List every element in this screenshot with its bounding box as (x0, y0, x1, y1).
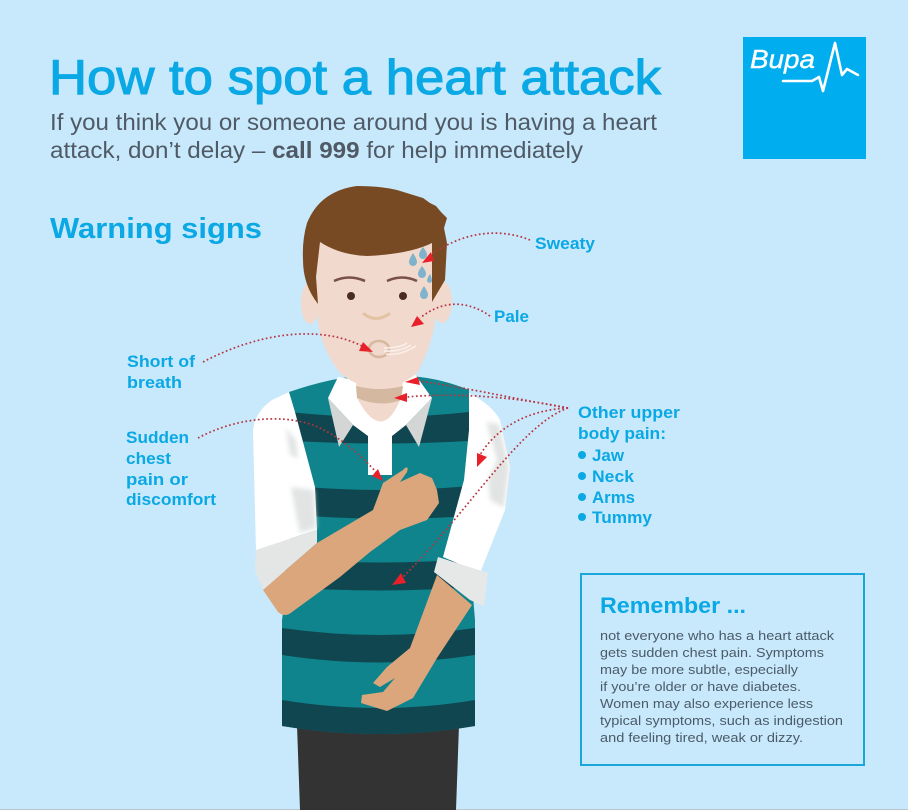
heading: warning signs: Warning signs (50, 213, 262, 245)
arrow: pale (411, 304, 490, 327)
label: short of breath (127, 353, 196, 392)
remember body text: may be more subtle, especially (600, 662, 799, 677)
arrow: short of breath (203, 334, 373, 362)
left sleeve (253, 392, 317, 550)
right sleeve (443, 393, 510, 573)
sweat drops (409, 247, 432, 299)
collar shadow tips (328, 398, 432, 447)
intro text (50, 109, 657, 163)
intro text: If you think you or someone around you is having a heart (50, 109, 657, 135)
label: other upper body pain: Tummy (592, 509, 653, 527)
smile (364, 314, 389, 318)
title: How to spot a heart attack (49, 51, 662, 105)
vest (282, 376, 475, 734)
arrow: chest pain (198, 419, 383, 481)
arrow: sweaty (422, 233, 530, 263)
illustration: man (253, 186, 510, 810)
label: other upper body pain: body pain: (578, 425, 666, 443)
label: sudden chest pain (126, 429, 217, 509)
label: other upper body pain: Other upper (578, 404, 681, 422)
neck shadow (356, 386, 403, 404)
label: sudden chest pain: chest (126, 450, 172, 468)
label: other upper body pain: Neck (592, 468, 635, 486)
right cuff (434, 557, 488, 606)
remember body text: if you’re older or have diabetes. (600, 679, 801, 694)
intro text: attack, don’t delay – call 999 for help immediately (50, 137, 583, 163)
right forearm and hand (361, 575, 472, 711)
remember heading: Remember ... (600, 593, 746, 618)
ears (301, 281, 452, 324)
label: pale: Pale (494, 308, 529, 326)
label: other upper body pain (578, 404, 681, 527)
mouth and breath (369, 341, 416, 357)
remember body text: Women may also experience less (600, 696, 814, 711)
remember body text (600, 628, 843, 745)
panel: remember (581, 574, 864, 765)
label: sweaty: Sweaty (535, 235, 596, 253)
left cuff (255, 530, 317, 590)
label: other upper body pain: Jaw (592, 447, 624, 465)
collar (328, 373, 432, 475)
remember body text: not everyone who has a heart attack (600, 628, 835, 643)
remember body text: and feeling tired, weak or dizzy. (600, 730, 803, 745)
right sleeve shading (486, 422, 509, 508)
label: other upper body pain: Arms (592, 489, 635, 507)
label: sudden chest pain: discomfort (126, 491, 217, 509)
neck (356, 375, 404, 424)
left sleeve shading (286, 428, 316, 533)
label: short of breath: breath (127, 374, 182, 392)
remember body text: gets sudden chest pain. Symptoms (600, 645, 825, 660)
arrows: other upper body pain (392, 377, 568, 585)
remember body text: typical symptoms, such as indigestion (600, 713, 843, 728)
trousers (297, 725, 459, 810)
label: sudden chest pain: pain or (126, 471, 189, 489)
label: sudden chest pain: Sudden (126, 429, 189, 447)
left forearm and fist (263, 468, 439, 615)
hair (303, 186, 447, 304)
eyes and eyebrows (334, 278, 417, 300)
Bupa logo (743, 37, 866, 159)
face (316, 240, 436, 388)
Bupa logo: Bupa (750, 44, 815, 74)
label: short of breath: Short of (127, 353, 196, 371)
